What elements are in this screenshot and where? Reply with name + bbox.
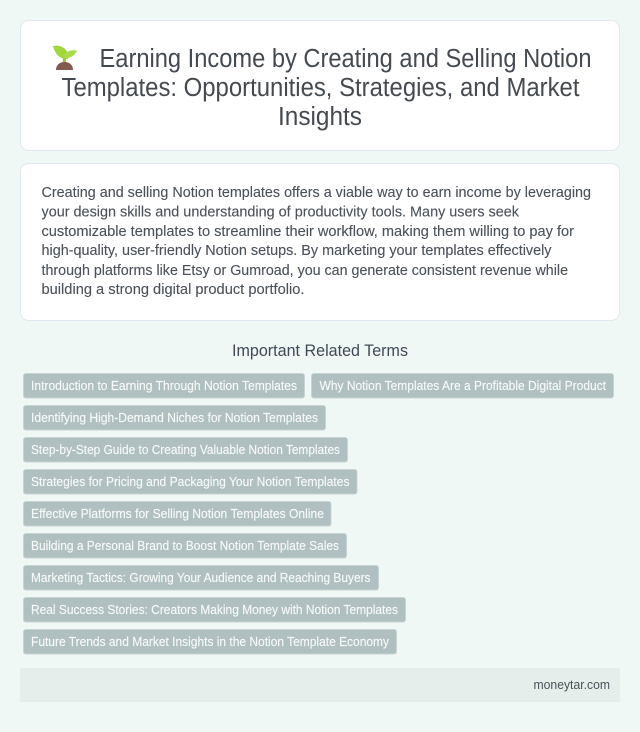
text block: introduction: through platforms like Etsy or Gumroad, you can generate consistent revenue while bbox=[42, 262, 568, 279]
text block: introduction: building a strong digital product portfolio. bbox=[42, 281, 304, 298]
tag: Introduction to Earning Through Notion Templates bbox=[31, 378, 297, 393]
text block: introduction: customizable templates to streamline their workflow, making them willing to pay for bbox=[42, 223, 574, 240]
heading: important related terms: Important Related Terms bbox=[232, 342, 408, 360]
panel: title card bbox=[20, 20, 620, 150]
tag: Building a Personal Brand to Boost Notion Template Sales bbox=[31, 538, 339, 553]
icon: sprout bbox=[53, 46, 77, 70]
tag bbox=[24, 566, 378, 590]
tag list bbox=[24, 374, 614, 654]
text block: introduction: high-quality, user-friendly Notion setups. By marketing your templates effectively bbox=[42, 242, 552, 259]
tag: Future Trends and Market Insights in the Notion Template Economy bbox=[31, 634, 389, 649]
tag bbox=[24, 406, 326, 430]
tag bbox=[312, 374, 614, 398]
title: Insights bbox=[278, 103, 362, 131]
tag: Step-by-Step Guide to Creating Valuable Notion Templates bbox=[31, 442, 340, 457]
tag bbox=[24, 470, 357, 494]
panel: introduction text card bbox=[20, 164, 620, 320]
text block: introduction: your design skills and understanding of productivity tools. Many users seek bbox=[42, 204, 519, 220]
title: Earning Income by Creating and Selling Notion bbox=[100, 45, 592, 73]
tag: Strategies for Pricing and Packaging Your Notion Templates bbox=[31, 474, 350, 489]
tag: Identifying High-Demand Niches for Notion Templates bbox=[31, 410, 318, 425]
tag bbox=[24, 374, 304, 398]
text block: introduction: Creating and selling Notion templates offers a viable way to earn income by leveraging bbox=[42, 184, 591, 201]
tag bbox=[24, 502, 331, 526]
tag: Marketing Tactics: Growing Your Audience and Reaching Buyers bbox=[31, 570, 371, 585]
tag: Effective Platforms for Selling Notion Templates Online bbox=[31, 506, 324, 521]
tag bbox=[24, 438, 348, 462]
tag bbox=[24, 598, 406, 622]
title: Templates: Opportunities, Strategies, and Market bbox=[62, 74, 580, 102]
tag: Why Notion Templates Are a Profitable Digital Product bbox=[320, 378, 606, 393]
tag: Real Success Stories: Creators Making Money with Notion Templates bbox=[31, 602, 398, 617]
title bbox=[62, 45, 592, 131]
tag bbox=[24, 534, 346, 558]
footer bbox=[20, 668, 620, 702]
text block: introduction bbox=[42, 184, 591, 298]
footer text: source: moneytar.com bbox=[534, 677, 610, 692]
tag bbox=[24, 630, 396, 654]
